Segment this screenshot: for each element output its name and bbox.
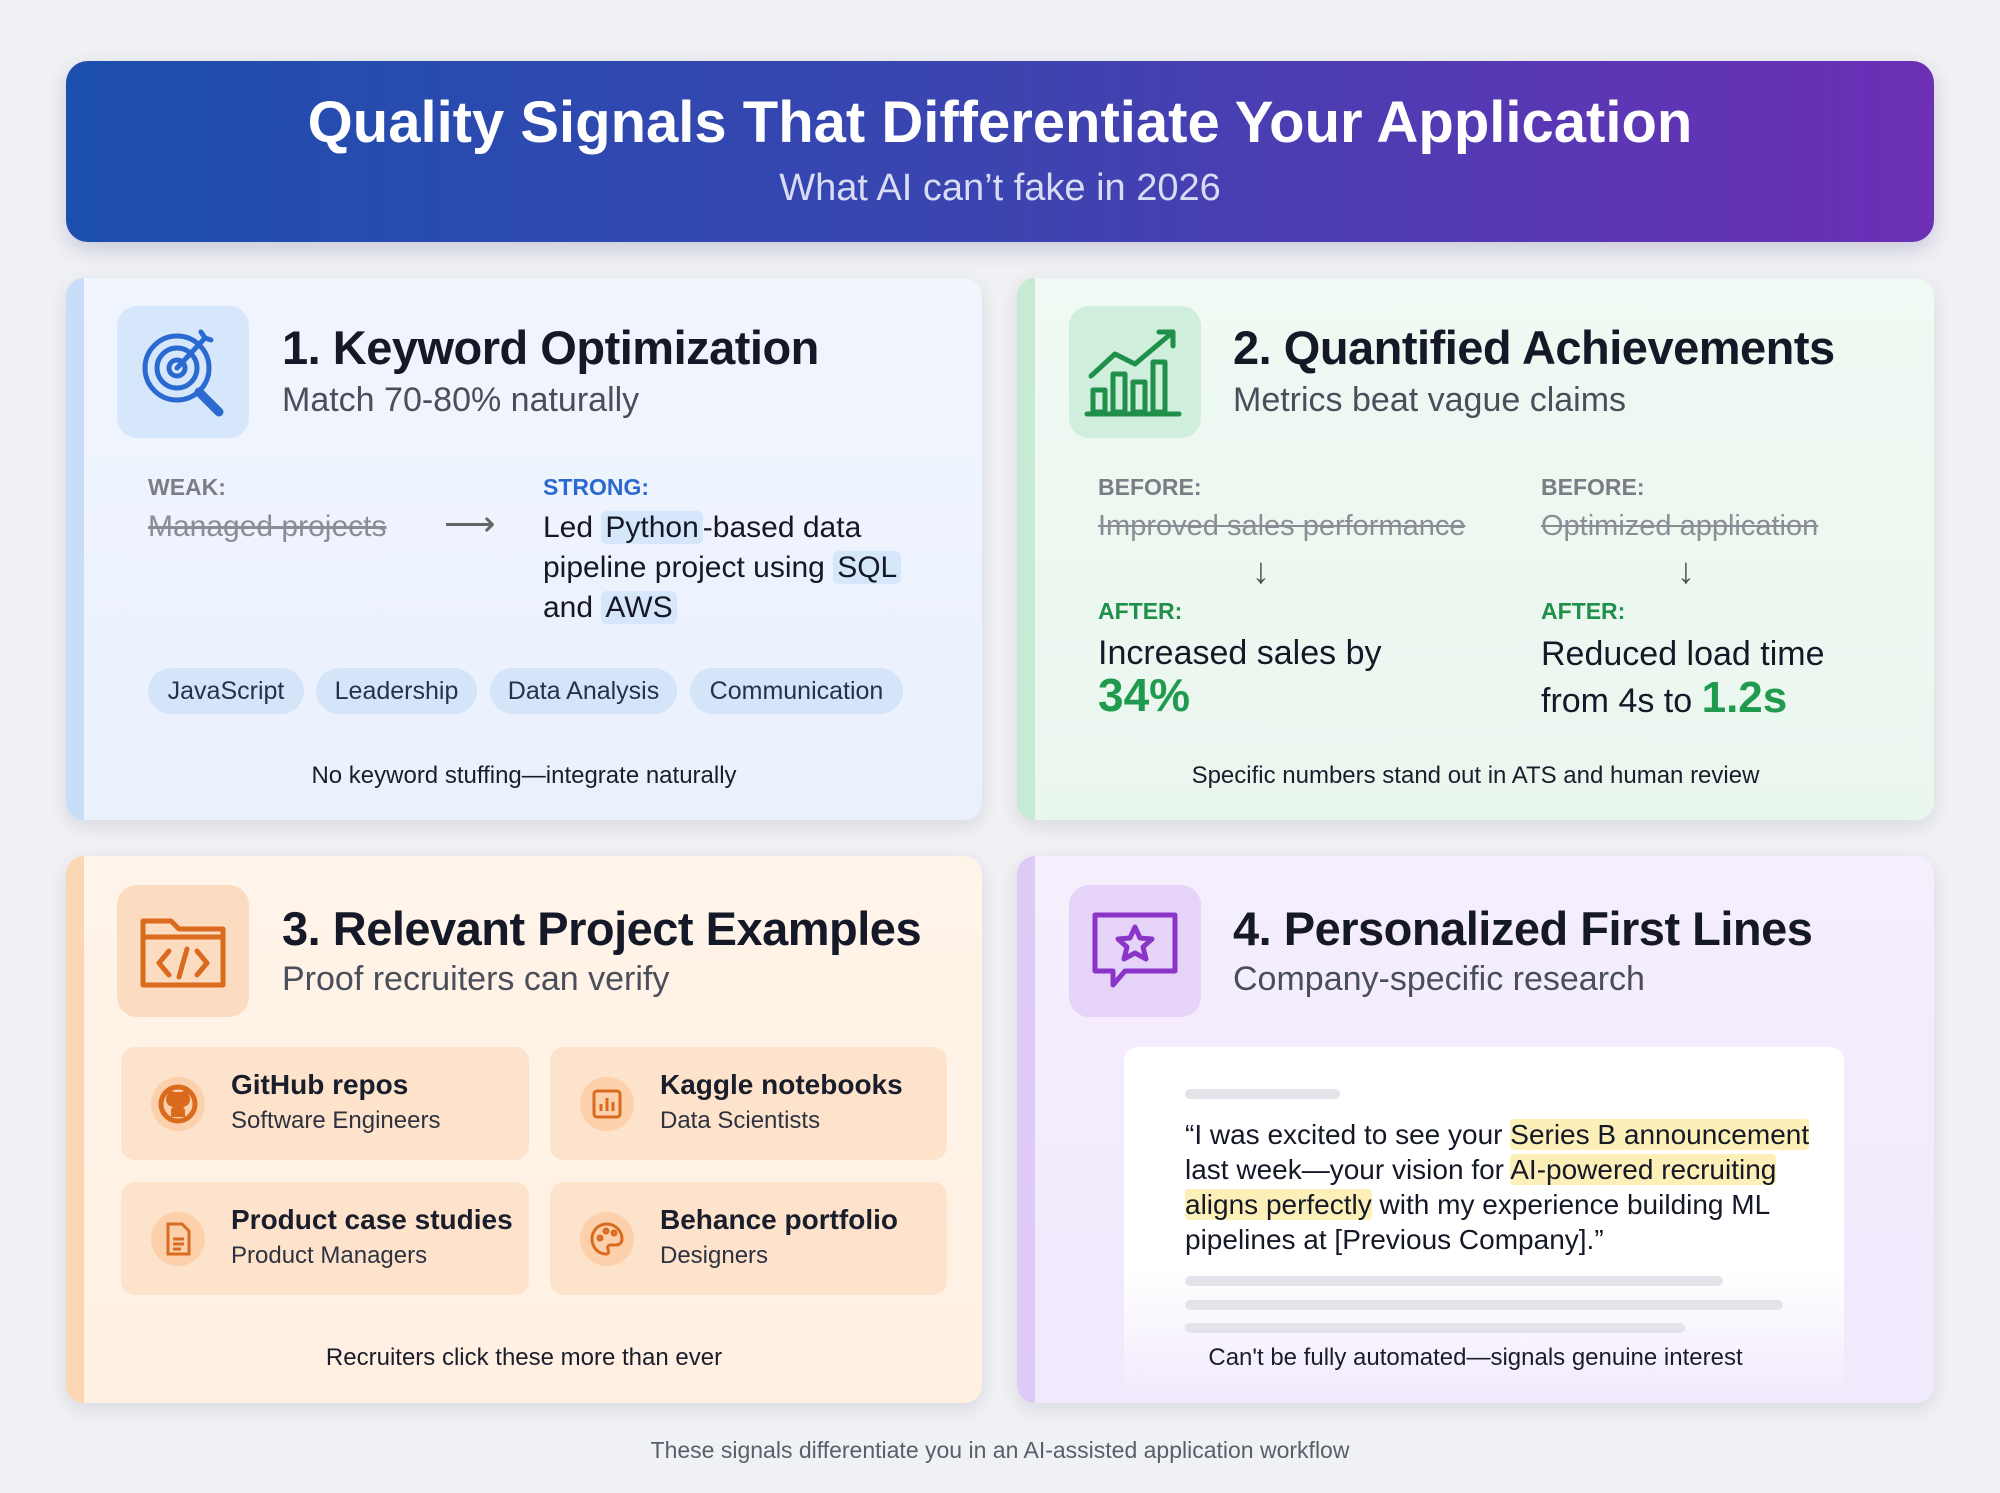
panel: relevant project examples xyxy=(66,856,982,1403)
strong example: pipeline project using SQL xyxy=(543,551,897,584)
panel: keyword optimization: WEAK: xyxy=(148,474,226,500)
heading: 1. Keyword Optimization xyxy=(282,321,819,374)
quote card xyxy=(1124,1047,1844,1403)
example: sales xyxy=(1098,474,1466,721)
strong example: STRONG: xyxy=(543,474,649,500)
card: github: Software Engineers xyxy=(231,1107,440,1134)
card: kaggle: Kaggle notebooks xyxy=(660,1069,903,1100)
card: github xyxy=(121,1047,529,1160)
heading: 4. Personalized First Lines xyxy=(1233,902,1812,955)
heading: 2. Quantified Achievements xyxy=(1233,321,1835,374)
example: load time: Reduced load time xyxy=(1541,635,1825,673)
title: Quality Signals That Differentiate Your Application xyxy=(308,90,1692,155)
quote text: aligns perfectly with my experience building ML xyxy=(1185,1189,1770,1220)
subheading: Metrics beat vague claims xyxy=(1233,381,1626,419)
icon: code folder xyxy=(117,885,249,1017)
example: load time: AFTER: xyxy=(1541,598,1625,624)
icon: target with magnifier xyxy=(117,306,249,438)
quote text: last week—your vision for AI-powered recruiting xyxy=(1185,1154,1776,1185)
strong example xyxy=(543,474,901,624)
card: product case studies: Product Managers xyxy=(231,1242,427,1269)
footer note: Can't be fully automated—signals genuine interest xyxy=(1208,1344,1743,1371)
bottom caption: These signals differentiate you in an AI-assisted application workflow xyxy=(651,1437,1349,1463)
example: load time: BEFORE: xyxy=(1541,474,1644,500)
example: load time: ↓ xyxy=(1677,550,1695,591)
card: behance: Behance portfolio xyxy=(660,1204,898,1235)
card: behance xyxy=(550,1182,947,1295)
arrow: ⟶ xyxy=(444,503,496,544)
keyword chips xyxy=(148,668,903,714)
card: github: GitHub repos xyxy=(231,1069,408,1100)
heading: 3. Relevant Project Examples xyxy=(282,902,921,955)
keyword chips: Communication xyxy=(710,677,883,705)
example: sales: Improved sales performance xyxy=(1098,510,1466,542)
card: kaggle: Data Scientists xyxy=(660,1107,820,1134)
quote text xyxy=(1185,1119,1809,1255)
subheading: Match 70-80% naturally xyxy=(282,381,639,419)
subheading: Proof recruiters can verify xyxy=(282,960,669,998)
keyword chips: Data Analysis xyxy=(508,677,659,705)
card: kaggle xyxy=(550,1047,947,1160)
subtitle: What AI can’t fake in 2026 xyxy=(779,167,1221,209)
example: sales: 34% xyxy=(1098,669,1190,721)
example: load time xyxy=(1541,474,1825,722)
card: behance: Designers xyxy=(660,1242,768,1269)
quote text: pipelines at [Previous Company].” xyxy=(1185,1224,1604,1255)
strong example: Led Python-based data xyxy=(543,511,861,544)
panel: quantified achievements xyxy=(1017,278,1934,820)
panel: personalized first lines xyxy=(1017,856,1934,1403)
example: load time: Optimized application xyxy=(1541,510,1818,542)
example: sales: Increased sales by xyxy=(1098,634,1382,672)
quote text: “I was excited to see your Series B announcement xyxy=(1185,1119,1809,1150)
footer note: Recruiters click these more than ever xyxy=(326,1344,722,1371)
example: sales: ↓ xyxy=(1252,550,1270,591)
weak example xyxy=(148,474,386,543)
strong example: and AWS xyxy=(543,591,673,624)
icon: growth chart xyxy=(1069,306,1201,438)
header banner xyxy=(66,61,1934,242)
project cards xyxy=(121,1047,947,1295)
icon: speech bubble star xyxy=(1069,885,1201,1017)
footer note: No keyword stuffing—integrate naturally xyxy=(311,762,737,789)
keyword chips: JavaScript xyxy=(168,677,284,705)
keyword chips: Leadership xyxy=(335,677,458,705)
card: product case studies xyxy=(121,1182,529,1295)
subheading: Company-specific research xyxy=(1233,960,1645,998)
example: sales: AFTER: xyxy=(1098,598,1182,624)
example: sales: BEFORE: xyxy=(1098,474,1202,500)
footer note: Specific numbers stand out in ATS and human review xyxy=(1192,762,1759,789)
card: product case studies: Product case studies xyxy=(231,1204,513,1235)
example: load time: from 4s to 1.2s xyxy=(1541,673,1787,722)
panel: keyword optimization xyxy=(66,278,982,820)
panel: keyword optimization: Managed projects xyxy=(148,510,386,543)
